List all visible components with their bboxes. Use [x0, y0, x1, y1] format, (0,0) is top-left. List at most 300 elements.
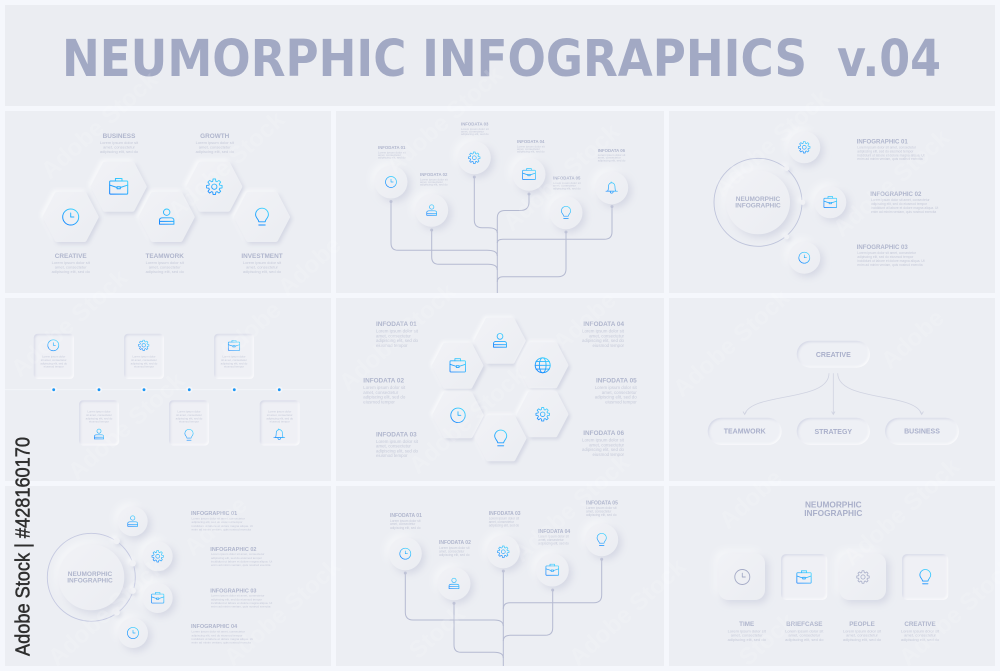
node 06 [595, 171, 628, 204]
text: infographic 03: adipiscing elit, sed do eiusmod tempor [857, 255, 914, 259]
panel: six-branch tree [336, 111, 664, 293]
panel: timeline cards [5, 298, 331, 481]
label: infodata 03: INFODATA 03 [376, 431, 417, 438]
card: clock: Lorem ipsum dolor [42, 355, 65, 359]
label: people: Lorem ipsum dolor sit [843, 628, 882, 633]
label: infodata 05: INFODATA 05 [596, 378, 637, 385]
text: infographic 03: adipiscing elit, sed do eiusmod tempor [211, 597, 262, 601]
card: gear: Lorem ipsum dolor [132, 355, 156, 359]
line end dots [390, 176, 614, 234]
text: infographic 02: incididunt ut labore et dolore magna aliqua. Ut [211, 559, 272, 563]
card: bell: eiusmod tempor [270, 420, 290, 424]
label: infodata 06: amet, consectetur [589, 442, 625, 448]
card: person: adipiscing elit, sed do [86, 416, 113, 420]
timeline line and dots [5, 386, 331, 393]
label 03 [489, 511, 521, 528]
label 04: INFODATA 04 [517, 139, 545, 144]
text: infographic 02 [210, 547, 272, 567]
label: briefcase: BRIEFCASE [786, 621, 822, 628]
central circle: INFOGRAPHIC [735, 202, 781, 209]
heading: INFOGRAPHIC [804, 508, 862, 518]
label: creative: CREATIVE [904, 621, 936, 628]
title: NEUMORPHIC INFOGRAPHICS [62, 30, 807, 89]
stock watermark: Adobe [179, 491, 253, 561]
stock watermark: Adobe Stock [334, 278, 462, 396]
stock watermark: Adobe Stock [404, 361, 532, 479]
label: infodata 03: adipiscing elit, sed do [376, 448, 419, 454]
text: infographic 04: adipiscing elit, sed do eiusmod tempor [192, 633, 243, 637]
node 04 [536, 554, 569, 586]
label 02: Lorem ipsum dolor sit [420, 177, 448, 181]
stock watermark: Adobe Stock [828, 124, 956, 242]
label 01: adipiscing elit, sed do [378, 156, 406, 160]
pill: business: BUSINESS [904, 428, 940, 436]
stock watermark: Adobe Stock [63, 367, 191, 485]
central circle [726, 170, 790, 234]
stock watermark: Stock [734, 607, 801, 671]
label 02: Lorem ipsum dolor sit [439, 546, 470, 550]
label: business: Lorem ipsum dolor sit [100, 140, 139, 145]
card: clock: eiusmod tempor [44, 365, 64, 369]
text: infographic 01: incididunt ut labore et dolore magna aliqua. Ut [192, 524, 253, 528]
hexagon: globe [519, 344, 567, 386]
label 05: amet, consectetur [553, 184, 576, 188]
label: infodata 06: INFODATA 06 [583, 430, 624, 437]
label 03: Lorem ipsum dolor sit [461, 127, 489, 131]
node 01 [389, 537, 422, 570]
card: bell: Lorem ipsum dolor [268, 410, 291, 414]
label 05 [586, 500, 618, 517]
label: people: PEOPLE [849, 621, 875, 628]
label: creative: Lorem ipsum dolor sit [901, 628, 940, 633]
label: business: adipiscing elit, sed do [100, 149, 139, 154]
ring connector dots [784, 166, 805, 239]
label 04: adipiscing elit, sed do [538, 542, 569, 546]
label: time: adipiscing elit, sed do [728, 637, 767, 642]
label: creative [901, 621, 940, 642]
label: creative: adipiscing elit, sed do [901, 637, 940, 642]
tree connector lines [405, 559, 602, 666]
hexagon: person [476, 320, 524, 362]
label: infodata 05: amet, consectetur [602, 390, 637, 395]
label: infodata 02: Lorem ipsum dolor sit [363, 385, 406, 390]
hexagon: investment [236, 194, 288, 240]
label: creative: Lorem ipsum dolor sit [52, 260, 91, 265]
satellite: clock [118, 618, 148, 648]
label: investment: amet, consectetur [246, 264, 279, 269]
central circle: INFOGRAPHIC [67, 577, 113, 584]
label: teamwork: amet, consectetur [149, 264, 181, 269]
stock watermark: Adobe Stock [564, 553, 692, 671]
label: time: TIME [739, 621, 754, 628]
card: briefcase [781, 554, 827, 600]
label 01: INFODATA 01 [378, 145, 406, 150]
label: infodata 03 [376, 431, 419, 458]
hexagon: clock [434, 394, 482, 436]
text: infographic 03: incididunt ut labore et dolore magna aliqua. Ut [857, 259, 925, 263]
text: infographic 02: enim ad minim veniam, quis nostrud exercita [871, 210, 936, 214]
label 02: adipiscing elit, sed do [420, 183, 448, 187]
satellite: gear [143, 541, 173, 571]
label: investment: adipiscing elit, sed do [243, 269, 282, 274]
label: time: amet, consectetur [731, 633, 763, 638]
text: infographic 04: enim ad minim veniam, quis nostrud exercita [192, 641, 251, 645]
text: infographic 04: incididunt ut labore et dolore magna aliqua. Ut [192, 637, 253, 641]
label: teamwork: Lorem ipsum dolor sit [146, 260, 185, 265]
text: infographic 04: INFOGRAPHIC 04 [191, 624, 238, 630]
label 03: adipiscing elit, sed do [461, 132, 489, 136]
panel: five-branch tree [336, 486, 664, 666]
pill: teamwork [708, 418, 782, 445]
stock watermark: Adobe [714, 464, 788, 534]
card: bulb: adipiscing elit, sed do [176, 416, 203, 420]
label 05: INFODATA 05 [553, 176, 581, 180]
text: infographic 01: INFOGRAPHIC 01 [191, 511, 237, 517]
label: infodata 04 [582, 321, 625, 348]
card: time [718, 553, 765, 600]
text: infographic 03: INFOGRAPHIC 03 [210, 588, 256, 594]
pill: strategy: STRATEGY [814, 429, 852, 436]
label 04: amet, consectetur [517, 147, 540, 151]
label 05: Lorem ipsum dolor sit [553, 181, 581, 185]
card: bell [260, 400, 300, 446]
panel: title banner [5, 5, 995, 106]
label: infodata 02: amet, consectetur [363, 390, 399, 395]
text: infographic 02 [870, 191, 938, 214]
label 01: Lorem ipsum dolor sit [378, 150, 406, 154]
text: infographic 02: adipiscing elit, sed do eiusmod tempor [871, 202, 928, 206]
stock watermark: Adobe Stock [163, 106, 291, 224]
label: growth: amet, consectetur [199, 144, 231, 149]
card: people [839, 553, 886, 600]
label 04: adipiscing elit, sed do [517, 150, 545, 154]
satellite: briefcase [143, 583, 173, 613]
text: infographic 04: Lorem ipsum dolor sit amet, consectetur [192, 630, 245, 634]
text: infographic 03: enim ad minim veniam, quis nostrud exercita [857, 263, 923, 267]
label 02: amet, consectetur [420, 180, 443, 184]
satellite: clock [788, 242, 820, 274]
stock watermark: Adobe Stock [6, 264, 134, 382]
text: infographic 04 [191, 624, 253, 645]
satellite: person [118, 506, 148, 536]
hexagon: bulb [477, 417, 525, 459]
label: teamwork: adipiscing elit, sed do [146, 269, 185, 274]
label: people: adipiscing elit, sed do [843, 637, 882, 642]
label: infodata 03: Lorem ipsum dolor sit [376, 439, 419, 444]
stock watermark: Adobe [213, 296, 287, 366]
title: v.04 [837, 30, 941, 89]
label: infodata 05: eiusmod tempor [605, 400, 637, 404]
heading [804, 500, 862, 518]
label: business: BUSINESS [103, 133, 136, 140]
text: infographic 01 [191, 511, 253, 531]
text: infographic 03: INFOGRAPHIC 03 [857, 244, 908, 251]
hexagon: briefcase [434, 345, 482, 387]
label 04: INFODATA 04 [538, 529, 570, 535]
label: investment [241, 253, 283, 274]
label 05 [553, 176, 581, 190]
label: infodata 04: eiusmod tempor [593, 343, 625, 348]
stock watermark: Adobe Stock [381, 61, 509, 179]
card: bulb: sit amet, consectetur [176, 413, 202, 417]
ring connector dots [114, 538, 136, 616]
hexagon: business [93, 164, 145, 210]
card: clock: adipiscing elit, sed do [40, 361, 68, 365]
text: infographic 02: incididunt ut labore et dolore magna aliqua. Ut [871, 206, 938, 210]
stock watermark: Adobe [876, 304, 950, 374]
stock watermark: Adobe Stock [36, 66, 164, 184]
label 02 [439, 540, 471, 557]
label 03: adipiscing elit, sed do [489, 524, 519, 528]
card: bulb: Lorem ipsum dolor [177, 410, 201, 414]
label 02: INFODATA 02 [420, 172, 448, 177]
heading: NEUMORPHIC [805, 500, 862, 510]
stock watermark: Adobe [273, 231, 347, 301]
label: infodata 05 [595, 378, 637, 404]
card: clock: sit amet, consectetur [41, 358, 67, 362]
card: person: eiusmod tempor [89, 420, 109, 424]
label 04: Lorem ipsum dolor sit [538, 534, 569, 538]
label: infodata 01: Lorem ipsum dolor sit [376, 328, 419, 334]
stock watermark: Adobe Stock [43, 553, 171, 671]
label: growth: GROWTH [200, 133, 230, 140]
text: infographic 01: incididunt ut labore et dolore magna aliqua. Ut [857, 153, 925, 157]
node 02 [415, 194, 448, 227]
label 03: INFODATA 03 [489, 511, 521, 517]
node 02 [438, 567, 470, 600]
label: briefcase [785, 621, 824, 642]
pill: teamwork: TEAMWORK [724, 428, 766, 436]
central circle: NEUMORPHIC [736, 196, 781, 203]
card: bell: sit amet, consectetur [267, 413, 293, 417]
text: infographic 03 [210, 588, 272, 609]
label 03 [461, 122, 489, 136]
label: infodata 05: Lorem ipsum dolor sit [595, 385, 637, 390]
label 02: adipiscing elit, sed do [439, 553, 470, 557]
text: infographic 02: Lorem ipsum dolor sit amet, consectetur [871, 198, 931, 202]
label: infodata 02: eiusmod tempor [363, 400, 395, 404]
label: investment: INVESTMENT [241, 253, 283, 260]
card: person: Lorem ipsum dolor [87, 410, 111, 414]
hexagon: teamwork [141, 194, 193, 240]
text: infographic 01: enim ad minim veniam, quis nostrud exercita [192, 527, 251, 531]
panel: circle with three satellites [669, 111, 995, 293]
stock watermark: Adobe Stock [668, 284, 796, 402]
label 04: amet, consectetur [538, 538, 565, 542]
label: briefcase: Lorem ipsum dolor sit [785, 628, 824, 633]
label 06: adipiscing elit, sed do [598, 158, 626, 162]
card: gear [124, 334, 164, 379]
label: infodata 01: adipiscing elit, sed do [376, 338, 419, 343]
label: briefcase: amet, consectetur [788, 633, 821, 638]
text: infographic 03 [857, 244, 925, 267]
label: infodata 02 [363, 377, 406, 404]
label 01: Lorem ipsum dolor sit [390, 519, 421, 523]
label 06 [598, 148, 626, 162]
text: infographic 03: enim ad minim veniam, quis nostrud exercita [211, 605, 271, 609]
label: infodata 03: eiusmod tempor [376, 453, 408, 458]
card: creative [902, 554, 948, 600]
label: infodata 02: INFODATA 02 [363, 377, 404, 384]
stock watermark: Stock [404, 600, 471, 664]
label: infodata 04: adipiscing elit, sed do [582, 338, 625, 343]
label 01: amet, consectetur [378, 153, 401, 157]
text: infographic 03: incididunt ut labore et dolore magna aliqua. Ut [211, 601, 272, 605]
text: infographic 02: enim ad minim veniam, quis nostrud exercita [211, 563, 271, 567]
label: creative: amet, consectetur [55, 264, 87, 269]
node 01 [374, 166, 408, 198]
label: time: Lorem ipsum dolor sit [728, 628, 767, 633]
label 06: amet, consectetur [598, 156, 621, 160]
label 05: Lorem ipsum dolor sit [586, 506, 617, 510]
label 06: Lorem ipsum dolor sit [598, 153, 626, 157]
pill: creative [797, 341, 870, 368]
satellite: gear [788, 131, 820, 163]
node 05 [550, 196, 582, 229]
pill: creative: CREATIVE [816, 352, 851, 359]
panel: four square icons [669, 486, 995, 666]
label 01 [378, 145, 406, 160]
line end dots [404, 558, 603, 605]
card: briefcase: eiusmod tempor [224, 365, 244, 369]
label: growth [196, 133, 235, 154]
label 04 [517, 139, 545, 154]
card: person: sit amet, consectetur [86, 413, 112, 417]
label: time [728, 621, 767, 642]
card: briefcase: adipiscing elit, sed do [221, 361, 248, 365]
text: infographic 02: INFOGRAPHIC 02 [210, 547, 256, 553]
hexagon: creative [45, 194, 97, 240]
text: infographic 01: Lorem ipsum dolor sit amet, consectetur [857, 145, 917, 149]
stock watermark: Adobe Stock [498, 118, 626, 236]
tree connector lines [391, 177, 612, 293]
label 01: INFODATA 01 [390, 513, 422, 519]
label 04: Lorem ipsum dolor sit [517, 144, 545, 148]
text: infographic 02: Lorem ipsum dolor sit amet, consectetur [211, 552, 264, 556]
text: infographic 01: adipiscing elit, sed do eiusmod tempor [857, 149, 914, 153]
label: teamwork [146, 253, 185, 274]
label 01 [390, 513, 422, 530]
ring [714, 158, 802, 246]
stock watermark: Adobe [548, 286, 622, 356]
text: infographic 01: adipiscing elit, sed do eiusmod tempor [192, 520, 243, 524]
stock watermark: Adobe Stock [838, 453, 966, 571]
label: growth: Lorem ipsum dolor sit [196, 140, 235, 145]
label: creative: CREATIVE [55, 253, 87, 260]
stock watermark: Adobe Stock [508, 449, 636, 567]
node 03 [458, 141, 491, 174]
label: infodata 04: amet, consectetur [589, 333, 625, 338]
label: growth: adipiscing elit, sed do [196, 149, 235, 154]
hexagon: gear [519, 393, 567, 435]
central circle [58, 544, 124, 610]
label: infodata 01 [376, 321, 419, 348]
text: infographic 01: Lorem ipsum dolor sit amet, consectetur [192, 516, 245, 520]
label: infodata 06: Lorem ipsum dolor sit [582, 438, 625, 442]
label: infodata 01: INFODATA 01 [376, 321, 417, 328]
label 01: amet, consectetur [390, 522, 416, 526]
label: infodata 06 [582, 430, 625, 457]
label: investment: Lorem ipsum dolor sit [243, 260, 282, 265]
label 06: INFODATA 06 [598, 148, 626, 153]
text: infographic 03: Lorem ipsum dolor sit amet, consectetur [857, 251, 917, 255]
card: bell: adipiscing elit, sed do [266, 416, 294, 420]
card: person [79, 400, 119, 446]
label: infodata 05: adipiscing elit, sed do [595, 394, 637, 400]
label: people [843, 621, 882, 642]
label 01: adipiscing elit, sed do [390, 526, 421, 530]
text: infographic 01: INFOGRAPHIC 01 [857, 138, 908, 146]
label 03: amet, consectetur [489, 520, 515, 524]
label: infodata 04: Lorem ipsum dolor sit [582, 328, 625, 334]
text: infographic 03: Lorem ipsum dolor sit amet, consectetur [211, 594, 264, 598]
card: briefcase [214, 334, 254, 379]
label: infodata 04: INFODATA 04 [583, 321, 624, 328]
panel: hexagon steps [5, 111, 331, 293]
ring [47, 533, 135, 621]
central circle: NEUMORPHIC [68, 571, 113, 578]
card: gear: adipiscing elit, sed do [131, 361, 158, 365]
stock watermark: Adobe Stock [708, 84, 836, 202]
label: infodata 06: adipiscing elit, sed do [582, 447, 625, 452]
panel: circle with four satellites [5, 486, 331, 666]
label 05: adipiscing elit, sed do [553, 186, 581, 190]
label: creative: adipiscing elit, sed do [52, 269, 91, 274]
card: briefcase: Lorem ipsum dolor [222, 355, 246, 359]
label: infodata 01: eiusmod tempor [376, 343, 408, 348]
node 03 [487, 535, 520, 568]
pill: business [885, 418, 959, 445]
satellite: briefcase [814, 186, 846, 218]
label 03: amet, consectetur [461, 129, 484, 133]
label 02: amet, consectetur [439, 549, 465, 553]
label 04 [538, 529, 570, 546]
card: bulb: eiusmod tempor [179, 420, 199, 424]
label: business [100, 133, 139, 154]
label 05: amet, consectetur [586, 510, 612, 514]
card: clock [34, 334, 74, 379]
label 03: Lorem ipsum dolor sit [489, 516, 519, 520]
label: people: amet, consectetur [846, 633, 879, 638]
card: gear: eiusmod tempor [134, 365, 154, 369]
label: infodata 02: adipiscing elit, sed do [363, 394, 406, 400]
label: infodata 03: amet, consectetur [376, 444, 411, 448]
text: infographic 01 [857, 138, 925, 161]
label: creative [52, 253, 91, 274]
label 02: INFODATA 02 [439, 540, 471, 546]
card: briefcase: sit amet, consectetur [221, 358, 247, 362]
label: creative: amet, consectetur [904, 633, 937, 638]
node 05 [585, 523, 618, 556]
label: teamwork: TEAMWORK [146, 253, 184, 260]
text: infographic 02: adipiscing elit, sed do eiusmod tempor [211, 556, 262, 560]
node 04 [512, 158, 546, 191]
card: bulb [169, 400, 209, 446]
stock watermark: Adobe Stock [219, 553, 347, 671]
label 05: INFODATA 05 [586, 500, 618, 506]
label 05: adipiscing elit, sed do [586, 513, 617, 517]
label: business: amet, consectetur [103, 144, 136, 149]
text: infographic 02: INFOGRAPHIC 02 [870, 191, 922, 198]
panel: hexagon ring [336, 298, 664, 481]
panel: org chart pills [669, 298, 995, 481]
label: infodata 01: amet, consectetur [376, 333, 411, 338]
label: briefcase: adipiscing elit, sed do [785, 637, 824, 642]
label 03: INFODATA 03 [461, 122, 489, 126]
label 02 [420, 172, 448, 187]
text: infographic 01: enim ad minim veniam, quis nostrud exercita [857, 157, 923, 161]
hexagon: growth [188, 164, 240, 210]
